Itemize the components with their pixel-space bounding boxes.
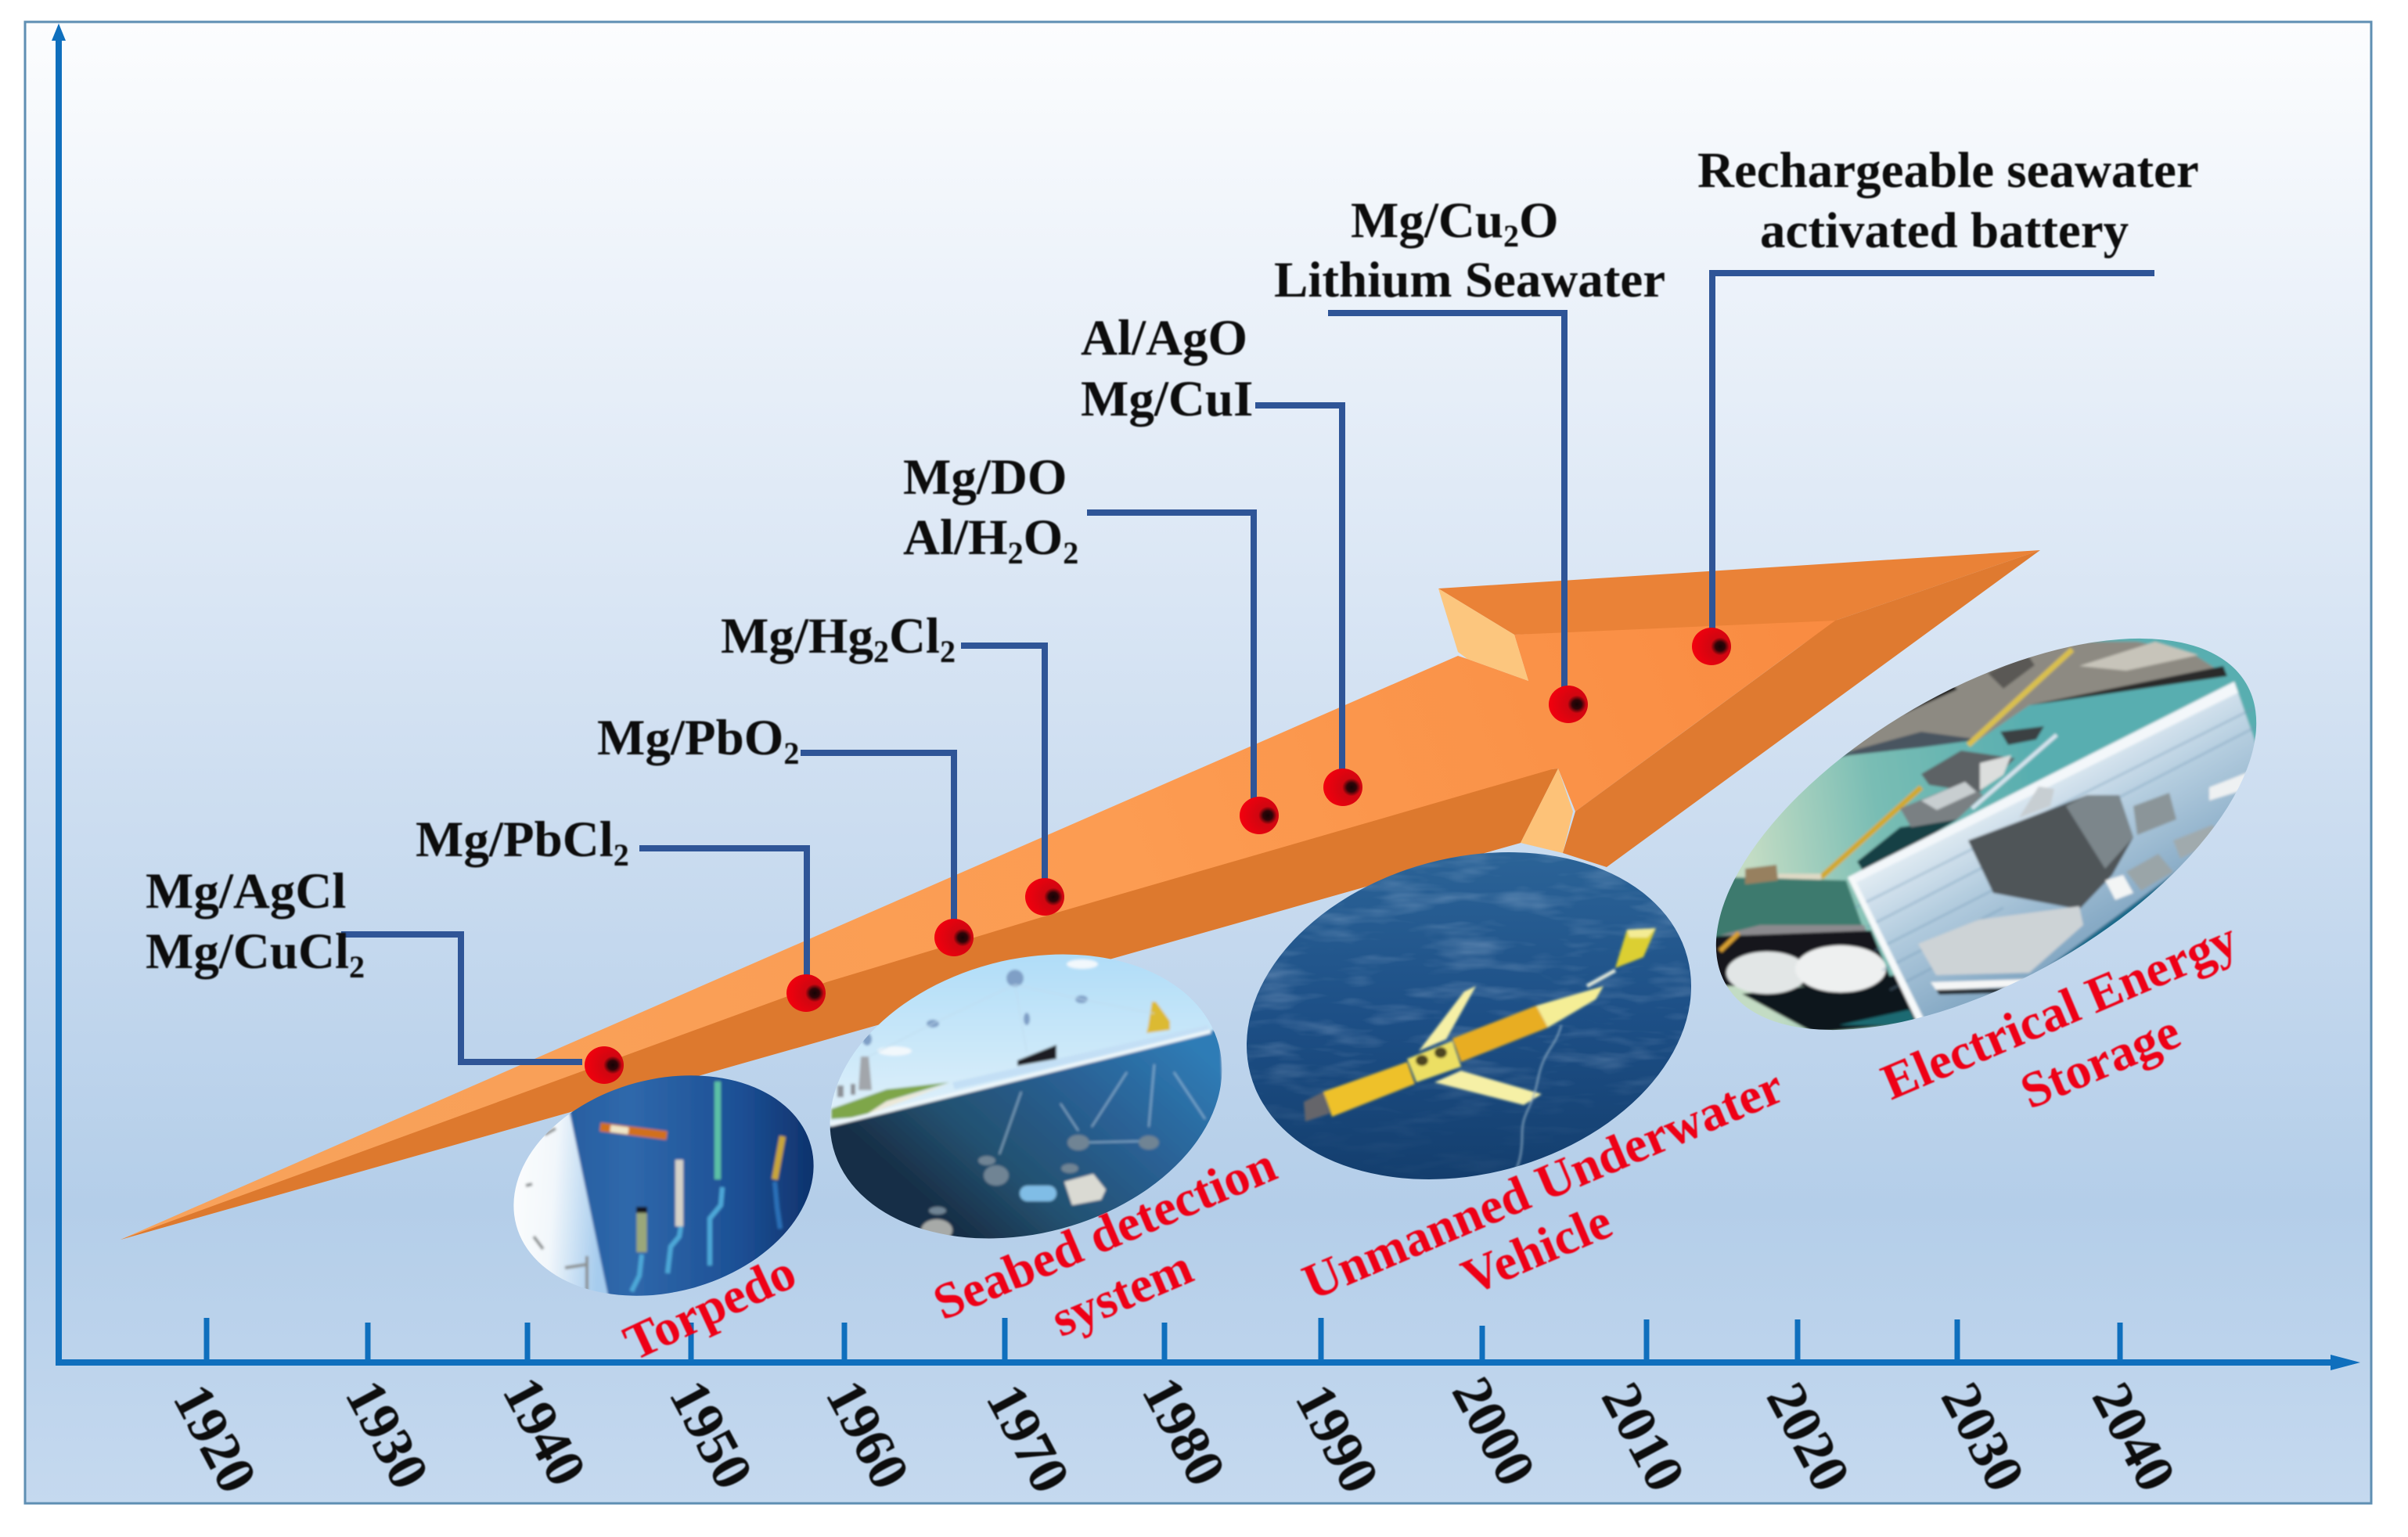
year labels: 1950 [657,1370,765,1499]
application labels: Storage [2013,1003,2188,1120]
image: torpedo [513,1075,814,1296]
battery labels: O [1024,509,1063,566]
year labels: 1990 [1283,1374,1391,1503]
image: seabed detection system [830,955,1222,1238]
battery labels: Mg/AgCl [146,863,346,920]
battery labels: Mg/CuCl [146,923,349,980]
application labels: system [1043,1239,1200,1348]
battery labels: 2 [1503,218,1519,254]
vertical axis arrow [52,23,66,1366]
battery labels: Mg/Cu [1351,193,1503,249]
application labels: Unmanned Underwater [1294,1058,1791,1312]
battery labels: Mg/Hg [721,608,873,664]
year labels: 1960 [814,1370,922,1499]
year labels [161,1367,2188,1503]
battery labels: 2 [349,949,365,984]
battery labels: Rechargeable seawater [1697,142,2199,199]
battery labels: Cl [889,608,940,664]
battery labels: 2 [1008,535,1024,571]
battery labels: Mg/PbCl [416,812,614,868]
application labels: Seabed detection [926,1136,1284,1331]
battery labels: 2 [940,634,956,669]
year labels: 1930 [333,1370,441,1499]
connector: rechargeable battery [1712,273,2154,646]
battery labels: Lithium Seawater [1274,252,1665,308]
year labels: 1940 [491,1367,599,1496]
battery labels: O [1519,193,1559,249]
battery labels: Mg/DO [903,449,1067,506]
big orange arrow [121,550,2040,1240]
horizontal axis arrow [56,1355,2360,1370]
year labels: 1970 [974,1374,1082,1503]
application labels: Torpedo [616,1244,804,1372]
image: electrical energy storage [1706,626,2269,1041]
battery labels: 2 [1063,535,1078,571]
application labels: Electrical Energy [1873,911,2245,1111]
battery labels: Mg/CuI [1081,371,1253,427]
connector lines [341,313,1564,1062]
battery labels: 2 [873,634,889,669]
year labels: 1920 [161,1374,269,1503]
battery labels: activated battery [1760,203,2129,259]
year labels: 2010 [1589,1373,1697,1501]
axis ticks [207,1318,2120,1362]
year labels: 2020 [1755,1373,1863,1501]
application labels: Vehicle [1454,1193,1620,1306]
year labels: 1980 [1130,1367,1238,1496]
timeline dots [585,628,1731,1084]
battery labels: Al/AgO [1081,310,1247,366]
application labels [616,911,2245,1372]
battery labels [146,142,2199,984]
battery labels: 2 [783,736,799,771]
battery labels: 2 [614,837,629,873]
year labels: 2000 [1440,1367,1548,1496]
battery labels: Al/H [903,509,1008,566]
year labels: 2030 [1929,1373,2037,1501]
battery labels: Mg/PbO [597,710,783,766]
image: unmanned underwater vehicle [1247,852,1691,1179]
year labels: 2040 [2080,1373,2188,1501]
